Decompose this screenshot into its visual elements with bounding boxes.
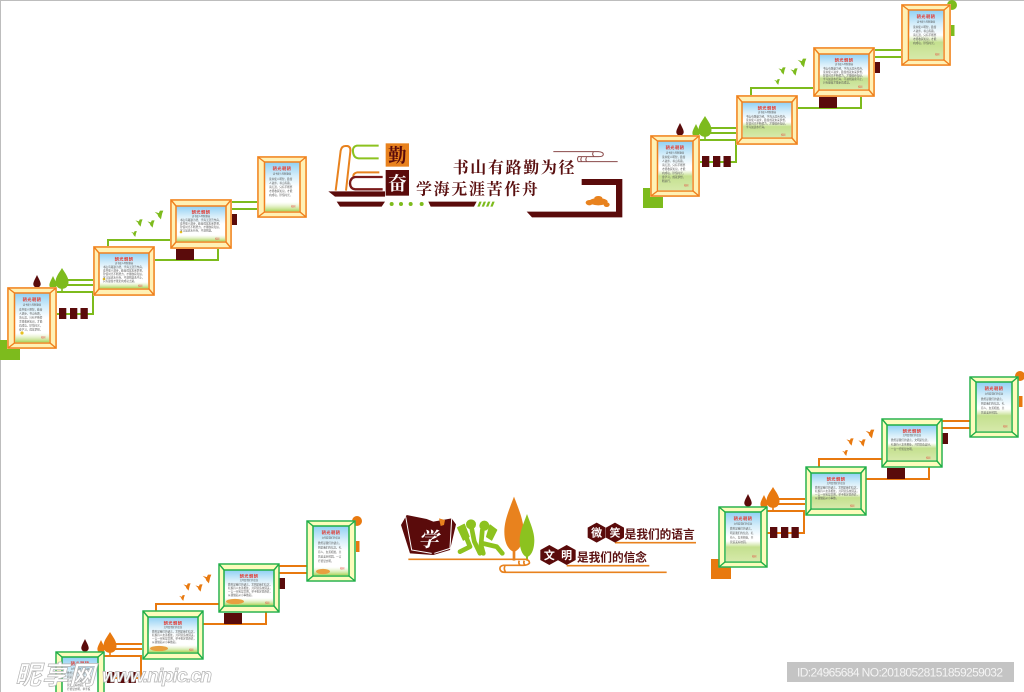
- hexagon: 微: [588, 523, 606, 543]
- frame 2: 文明是我们的信念: [827, 481, 846, 485]
- frame 4: 微笑是我们的语言，: [981, 397, 1004, 401]
- frame 3: 礼貌待人友善相处，共同营造校园美，: [228, 586, 272, 590]
- id bar: [787, 662, 1014, 682]
- frame 1: 微笑是我们的语言，: [67, 671, 90, 675]
- icon: book spines: [328, 146, 385, 197]
- hexagon: 文: 文: [544, 548, 555, 562]
- id bar: ID:24965684 NO:20180528151859259032: [797, 666, 1003, 680]
- frame 3: [218, 563, 280, 613]
- frame 3: 书山有路勤为径，学海无涯苦作舟，: [180, 218, 222, 222]
- frame 2: 从我做起从小事做，: [815, 496, 838, 500]
- frame 2: 一言一行皆显文明，举手投足见修养，: [815, 492, 859, 496]
- frame 2: 读书使人进步，勤奋成就未来梦想，: [103, 268, 144, 272]
- frame 2: 朝光朝朝: [758, 104, 776, 112]
- frame 3: 校园: [926, 456, 930, 460]
- frame 4: 海无涯。只有不断努: [269, 185, 293, 189]
- frame 2: 礼貌待人友善相处，共同营造校园美，: [815, 489, 859, 493]
- frame 4: 校园: [1003, 424, 1007, 428]
- frame 2: 文明是我们的信念: [164, 625, 183, 629]
- icon: scroll lines: [553, 152, 618, 162]
- frame 4: 待人，友善相处，共: [318, 550, 342, 554]
- frame 3: [170, 199, 232, 249]
- frame 2: [142, 610, 204, 660]
- frame 3: 文明是我们的信念: [240, 578, 259, 582]
- icon: open book with 学: 学: [418, 530, 441, 552]
- decorations: trees, birds, blocks: [48, 575, 285, 692]
- frame 1: 校园: [752, 554, 756, 558]
- frame 3: 从我做起从小事做起。: [228, 593, 254, 597]
- frame 3: 只有勤奋才能走向成功。: [823, 80, 852, 84]
- frame 4: 行皆显文明。: [318, 559, 334, 563]
- frame 3: [881, 418, 943, 468]
- frame 4: 校园: [291, 204, 295, 208]
- frame 1: 向成功。珍惜时光，: [662, 171, 685, 175]
- frame 1: 文明是我们的信念: [734, 522, 753, 526]
- frame 1: [650, 135, 700, 197]
- frame 4: 读书使人明智勤奋: [917, 20, 936, 24]
- frame 2: 朝光朝朝: [827, 476, 845, 482]
- frame 4: 读书使人明智，勤奋: [913, 25, 937, 29]
- frame 1: 海无涯。只有不断努: [19, 316, 43, 320]
- frame 2: 学习如逆水行舟。: [746, 125, 767, 129]
- frame 1: 营造美好校园。: [730, 540, 748, 544]
- icon: orange tree: [504, 497, 524, 561]
- frame 2: 校园: [189, 648, 193, 652]
- frame 4: 待人，友善相处，共: [981, 406, 1005, 410]
- frame 4: [306, 520, 356, 582]
- frame 3: 读书使人明智勤奋: [835, 62, 854, 66]
- frame 3: 读书使人进步，勤奋成就未来梦想，: [180, 222, 222, 226]
- frame 2: 书山有路勤为径，学海无涯苦作舟，: [746, 114, 788, 118]
- icon: green tree: [520, 514, 534, 561]
- frame 1: 微笑是我们的语言，: [730, 526, 753, 530]
- frame 2: 学习如逆水行舟，不进则退永不止，: [103, 276, 144, 280]
- frame 2: 珍惜时光不断努力，才能收获知识，: [103, 272, 144, 276]
- frame 3: 学习如逆水行舟，不进则退永不止，: [823, 77, 864, 81]
- frame 3: 珍惜时光不断努力，才能收获知识，: [180, 225, 222, 229]
- frame 2: 校园: [850, 504, 854, 508]
- frame 3: 书山有路勤为径，学海无涯苦作舟，: [823, 66, 864, 70]
- frame 3: 礼貌待人友善相处，共同营造美好，: [891, 442, 932, 446]
- frame 1: 待人，友善相处，共: [67, 679, 91, 683]
- hexagon: 微: 微: [591, 526, 602, 540]
- frame 1: 人进步。书山有路，: [662, 159, 685, 163]
- scroll and lines: [408, 543, 696, 572]
- frame 2: 微笑是我们的语言，文明是我们信念，: [815, 486, 859, 490]
- frame 1: 断前行。: [662, 179, 672, 183]
- icon: green reading children: [458, 522, 502, 553]
- watermark: nipic logo: 昵享网: [15, 660, 99, 690]
- frame 3: 微笑是我们的语言，文明是信念，: [891, 438, 930, 442]
- frame 3: 校园: [265, 600, 269, 604]
- frame 1: 才能收获知识，才能: [19, 320, 43, 324]
- frame 1: 校园: [684, 183, 688, 187]
- panel: lower-right staircase: [711, 371, 1024, 579]
- frame 1: [55, 651, 105, 692]
- frame 3: 朝光朝朝: [192, 208, 210, 216]
- frame 3: 读书使人进步，勤奋成就未来梦想，: [823, 70, 864, 74]
- frame 1: 朝光朝朝: [23, 296, 41, 303]
- frame 4: 营造美好校园。: [981, 410, 999, 414]
- icon: orange fish ornament: [586, 196, 610, 207]
- hexagon: 文: [540, 545, 558, 565]
- watermark: nipic logo: [15, 660, 212, 690]
- frame 1: 营造美好校园。一言: [67, 683, 91, 687]
- frame 3: 朝光朝朝: [835, 56, 853, 64]
- frame 4: 微笑是我们的语言，: [318, 541, 341, 545]
- frame 4: [969, 376, 1019, 438]
- frame 1: 奋学习，成就梦想。: [19, 328, 42, 332]
- panel: top-left staircase: [0, 156, 307, 360]
- frame 2: 朝光朝朝: [164, 620, 182, 626]
- frame 1: 待人，友善相处，共: [730, 536, 754, 540]
- frame 1: 海无涯。只有不断努: [662, 163, 686, 167]
- frame 4: 人进步。书山有路，: [269, 181, 292, 185]
- connectors: [767, 421, 970, 533]
- frame 3: 一言一行皆显文明。: [891, 447, 914, 451]
- frame 2: 校园: [781, 132, 785, 136]
- frame 4: 朝光朝朝: [917, 13, 935, 20]
- frame 1: 读书使人明智，勤奋: [662, 155, 686, 159]
- panel: top-right staircase: [643, 0, 957, 208]
- frame 3: 微笑是我们的语言，文明是我们信念，: [228, 582, 272, 586]
- hexagon: 笑: [606, 523, 624, 543]
- top cap: circle and tab: [352, 516, 362, 552]
- frame 4: 人进步。书山有路，: [913, 29, 936, 33]
- panel: lower-left staircase: [48, 516, 362, 692]
- frame 3: 学习如逆水行舟，不进则退。: [180, 228, 214, 232]
- frame 1: 朝光朝朝: [71, 660, 89, 667]
- frame 4: 向成功。珍惜时光。: [269, 193, 292, 197]
- frame 3: 读书使人明智勤奋: [192, 214, 211, 218]
- frame 4: 朝光朝朝: [322, 529, 340, 536]
- title block: 勤奋: [328, 143, 622, 217]
- slogan line 1: 书山有路勤为径: [453, 158, 576, 177]
- slogan: 是我们的语言: 是我们的语言: [625, 527, 695, 541]
- frame 2: 读书使人进步，勤奋成就未来梦想，: [746, 118, 788, 122]
- watermark: nipic logo: www.nipic.cn: [102, 665, 212, 687]
- hexagon: 明: [558, 545, 576, 565]
- connectors: [104, 566, 307, 678]
- frame 4: 才能收获知识，才能: [269, 189, 293, 193]
- frame 2: 书山有路勤为径，学海无涯苦作舟，: [103, 265, 144, 269]
- frame 4: 读书使人明智勤奋: [273, 172, 292, 176]
- frame 2: 校园: [138, 284, 142, 288]
- bracket: [527, 179, 622, 217]
- frame 3: [813, 47, 875, 97]
- frame 1: 人进步。书山有路，: [19, 312, 42, 316]
- frame 1: 明是我们的信念。礼: [730, 531, 754, 535]
- decorations: trees, birds, blocks: [711, 430, 948, 579]
- frame 2: 珍惜时光不断努力，才能收获知识，: [746, 122, 788, 126]
- frame 2: [805, 466, 867, 516]
- frame 4: 读书使人明智，勤奋: [269, 177, 293, 181]
- connectors: [56, 202, 259, 314]
- frame 4: 明是我们的信念。礼: [318, 546, 342, 550]
- frame 1: 文明是我们的信念: [71, 666, 90, 670]
- decorations: trees, birds, blocks: [643, 59, 880, 208]
- title block: 学: [401, 497, 696, 572]
- icon: open book with 学: [401, 515, 456, 555]
- frame 1: 朝光朝朝: [734, 515, 752, 522]
- heading tile: 奋: [386, 170, 409, 196]
- frame 1: 读书使人明智勤奋: [23, 302, 42, 306]
- frame 3: 校园: [215, 236, 219, 240]
- frame 1: [7, 287, 57, 349]
- frame 3: 文明是我们的信念: [903, 433, 922, 437]
- frame 3: 校园: [858, 84, 862, 88]
- frame 4: 校园: [340, 566, 344, 570]
- frame 4: 海无涯。只有不断努: [913, 33, 937, 37]
- top cap: circle and tab: [1015, 371, 1024, 407]
- frame 1: 才能收获知识，才能: [662, 167, 686, 171]
- frame 2: 朝光朝朝: [115, 256, 133, 262]
- frame 1: 奋学习，成就梦想，: [662, 175, 685, 179]
- frame 4: [257, 156, 307, 218]
- frame 4: 向成功。珍惜时光。: [913, 41, 936, 45]
- frame 2: [93, 246, 155, 296]
- frame 4: 文明是我们的信念: [322, 536, 341, 540]
- frame 4: [901, 4, 951, 66]
- frame 4: 明是我们的信念。礼: [981, 402, 1005, 406]
- frame 2: [736, 95, 798, 145]
- slogan: 是我们的信念: 是我们的信念: [577, 550, 647, 564]
- frame 1: 向成功。珍惜时光，: [19, 324, 42, 328]
- frame 1: 行皆显文明，举手投: [67, 687, 91, 691]
- decorations: trees, birds, blocks: [0, 211, 237, 360]
- frame 4: 朝光朝朝: [273, 165, 291, 172]
- frame 3: 珍惜时光不断努力，才能收获知识，: [823, 74, 864, 78]
- frame 2: 读书使人明智勤奋: [758, 110, 777, 114]
- top cap: circle and tab: [947, 0, 957, 36]
- frame 3: 朝光朝朝: [903, 428, 921, 434]
- frame 1: 朝光朝朝: [666, 144, 684, 151]
- frame 1: 读书使人明智，勤奋: [19, 308, 43, 312]
- frame 4: 营造美好校园。一言: [318, 554, 342, 558]
- frame 2: 读书使人明智勤奋: [115, 261, 134, 265]
- slogan line 2: 学海无涯苦作舟: [416, 180, 540, 199]
- frame 2: 只有勤奋才能走向成功之路。: [103, 279, 137, 283]
- hexagon: 笑: 笑: [609, 526, 620, 540]
- frame 2: 微笑是我们的语言，文明是我们信念，: [152, 630, 196, 634]
- frame 2: 一言一行皆显文明，举手投足见修养，: [152, 636, 196, 640]
- frame 1: [718, 506, 768, 568]
- hexagon: 明: 明: [561, 549, 572, 562]
- underline bars and dots: [337, 202, 495, 207]
- frame 1: 校园: [41, 335, 45, 339]
- frame 2: 礼貌待人友善相处，共同营造校园美，: [152, 633, 196, 637]
- frame 4: 才能收获知识，才能: [913, 37, 937, 41]
- frame 3: 朝光朝朝: [240, 572, 258, 580]
- frame 2: 从我做起从小事做起。: [152, 640, 178, 644]
- frame 1: 明是我们的信念。礼: [67, 675, 91, 679]
- connectors: [699, 50, 902, 162]
- heading tile: 奋: 奋: [388, 174, 407, 195]
- heading tile: 勤: 勤: [388, 146, 407, 167]
- frame 4: 文明是我们的信念: [985, 392, 1004, 396]
- frame 3: 一言一行皆显文明，举手投足见修养，: [228, 590, 272, 594]
- frame 4: 朝光朝朝: [985, 385, 1003, 392]
- frame 4: 校园: [935, 52, 939, 56]
- frame 1: 读书使人明智勤奋: [666, 150, 685, 154]
